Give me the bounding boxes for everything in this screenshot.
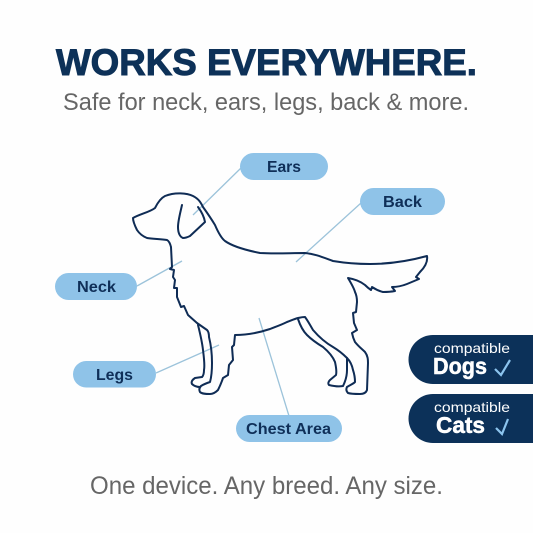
footer tagline: One device. Any breed. Any size. [90,472,443,500]
ear [178,205,205,238]
label: Chest Area: Chest Area [246,421,331,438]
label: Back [360,188,445,215]
label: Legs [73,361,156,388]
label: Ears: Ears [267,159,301,176]
leader lines [137,168,361,416]
badge: compatible cats [408,394,533,443]
label: Neck: Neck [77,279,116,296]
badge: compatible dogs: compatible [434,340,510,356]
subtitle: Safe for neck, ears, legs, back & more. [63,89,469,116]
badge: compatible cats: compatible [434,399,510,415]
label: Legs: Legs [96,367,133,384]
label: Neck [55,273,137,300]
badge: compatible dogs: Dogs [433,353,487,379]
title: WORKS EVERYWHERE. [56,41,477,83]
dog outline [133,193,427,394]
icon: check [495,360,510,375]
dog body [133,193,427,394]
label: Back: Back [383,194,422,211]
far hind leg [298,319,347,386]
label: Ears [240,153,328,180]
label: Chest Area [236,415,342,442]
far front leg [192,325,204,387]
badge: compatible cats: Cats [436,412,485,438]
icon: check [496,419,508,434]
badge: compatible dogs [408,335,533,384]
